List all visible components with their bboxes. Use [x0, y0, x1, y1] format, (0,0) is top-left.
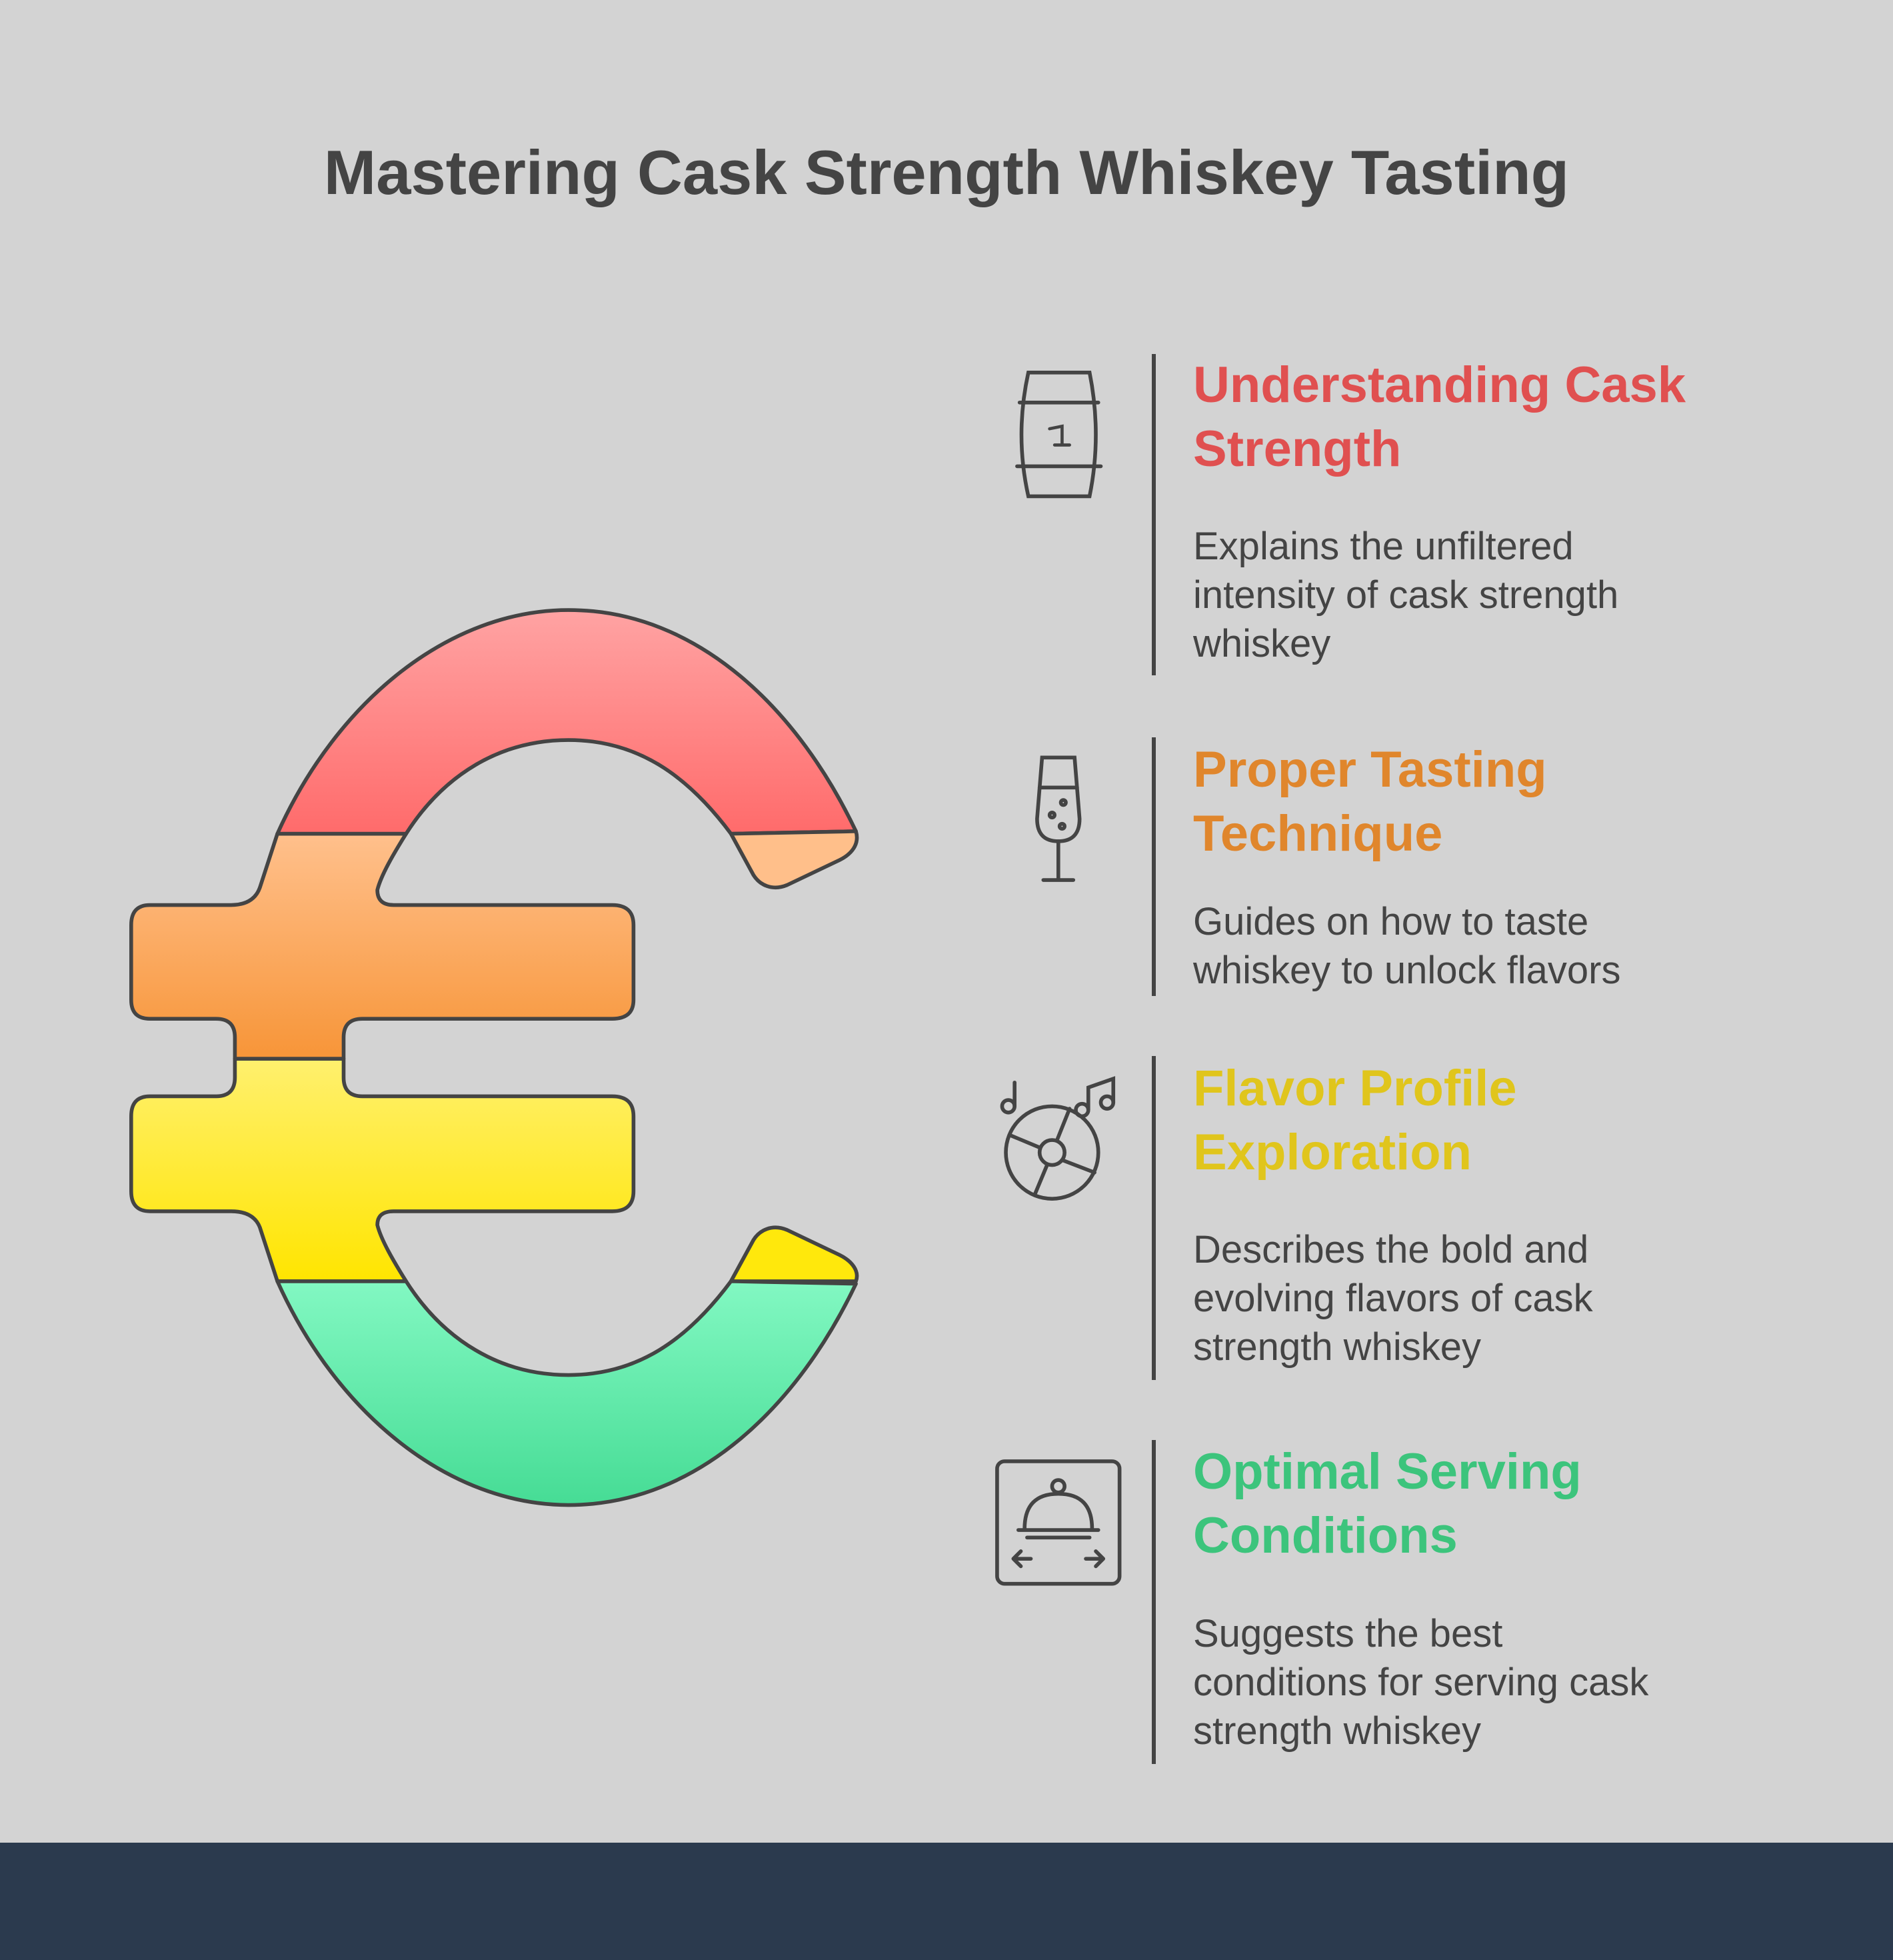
section 1 text — [1193, 525, 1618, 665]
section 1 text: Explains the unfiltered — [1193, 525, 1574, 568]
euro: yellow band — [131, 1059, 857, 1281]
section 2 text: whiskey to unlock flavors — [1193, 949, 1620, 992]
section 2 heading: Technique — [1193, 805, 1442, 862]
section 2 heading — [1193, 741, 1547, 862]
divider lines — [1152, 354, 1156, 675]
section 3 text: strength whiskey — [1193, 1325, 1481, 1369]
euro: green bottom band — [277, 1281, 856, 1505]
section 4 heading: Optimal Serving — [1193, 1443, 1582, 1500]
section 1 heading: Strength — [1193, 421, 1401, 477]
section 1 text: intensity of cask strength — [1193, 573, 1618, 617]
section 3 text: Describes the bold and — [1193, 1228, 1588, 1271]
icon: barrel — [1017, 373, 1101, 496]
section 2 text: Guides on how to taste — [1193, 900, 1588, 943]
footer band — [0, 1843, 1893, 1960]
section 4 heading: Conditions — [1193, 1507, 1458, 1564]
section 4 text — [1193, 1612, 1649, 1753]
icon: serving cloche — [997, 1461, 1120, 1584]
section 3 heading: Flavor Profile — [1193, 1060, 1517, 1117]
section 3 text: evolving flavors of cask — [1193, 1277, 1593, 1320]
section 3 heading — [1193, 1060, 1517, 1181]
section 3 heading: Exploration — [1193, 1124, 1472, 1181]
section 1 text: whiskey — [1193, 622, 1330, 665]
section 4 text: Suggests the best — [1193, 1612, 1502, 1655]
icon: wine glass — [1037, 757, 1080, 880]
section 1 heading — [1193, 357, 1686, 477]
section 3 text — [1193, 1228, 1593, 1369]
section 1 heading: Understanding Cask — [1193, 357, 1686, 413]
title: Mastering Cask Strength Whiskey Tasting — [324, 137, 1569, 207]
icon: disc with notes — [1002, 1079, 1113, 1199]
section 2 text — [1193, 900, 1620, 992]
section 4 heading — [1193, 1443, 1582, 1564]
section 2 heading: Proper Tasting — [1193, 741, 1547, 798]
section 4 text: conditions for serving cask — [1193, 1661, 1648, 1704]
section 4 text: strength whiskey — [1193, 1709, 1481, 1753]
euro: orange band — [131, 831, 857, 1059]
euro: red top band — [277, 610, 856, 834]
